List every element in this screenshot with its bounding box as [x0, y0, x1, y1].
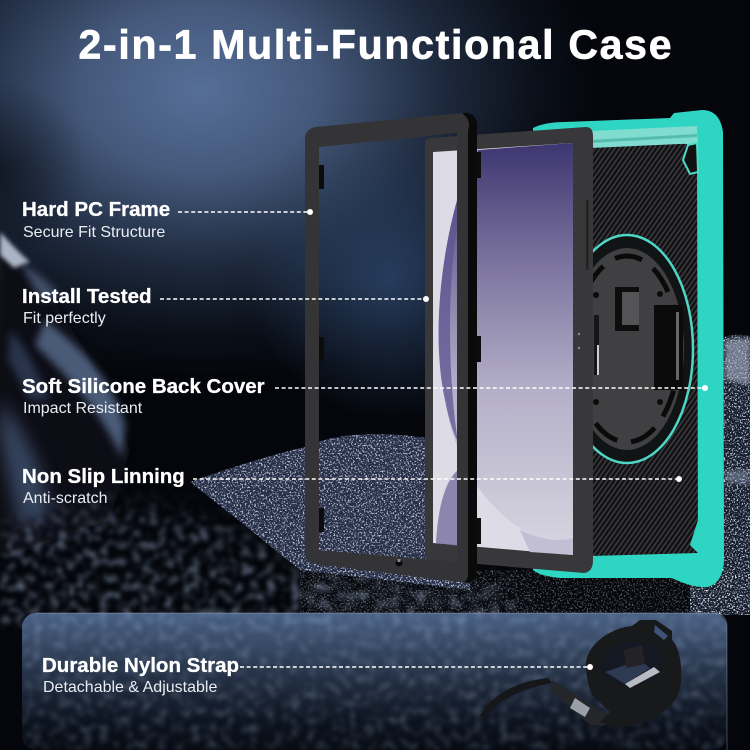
carbon fibre back panel — [590, 144, 698, 556]
bottom strap panel — [22, 613, 727, 750]
callout: soft silicone back cover — [22, 375, 708, 417]
home-button hole — [396, 560, 402, 566]
tablet screen — [433, 143, 573, 555]
callout: durable nylon strap: Durable Nylon Strap — [42, 654, 239, 677]
camera cutout — [683, 143, 698, 174]
callout: hard PC frame: Secure Fit Structure — [23, 224, 165, 241]
background: blurred ground blobs — [0, 493, 530, 629]
tablet — [425, 127, 593, 573]
callout: durable nylon strap — [42, 654, 593, 696]
callout: non slip lining — [22, 465, 682, 507]
rotating hand grip — [593, 234, 694, 464]
callout: non slip lining: Anti-scratch — [23, 490, 107, 507]
callout: hard PC frame: Hard PC Frame — [22, 198, 170, 221]
callout: durable nylon strap: Detachable & Adjustable — [43, 679, 217, 696]
callout: install tested: Fit perfectly — [23, 310, 106, 327]
title: 2-in-1 Multi-Functional Case — [78, 22, 672, 68]
back cover: teal silicone case — [533, 110, 724, 587]
callout: install tested: Install Tested — [22, 285, 152, 308]
callout: soft silicone back cover: Impact Resistant — [23, 400, 143, 417]
callout: install tested — [22, 285, 429, 327]
background: blurred rock at left — [0, 232, 130, 560]
callout: soft silicone back cover: Soft Silicone Back Cover — [22, 375, 265, 398]
nylon strap — [480, 620, 681, 728]
frame clips — [319, 165, 324, 189]
callout: hard PC frame — [22, 198, 313, 241]
background: sparkling ground — [190, 110, 750, 702]
callout: non slip lining: Non Slip Linning — [22, 465, 185, 488]
hard PC frame — [305, 113, 481, 583]
